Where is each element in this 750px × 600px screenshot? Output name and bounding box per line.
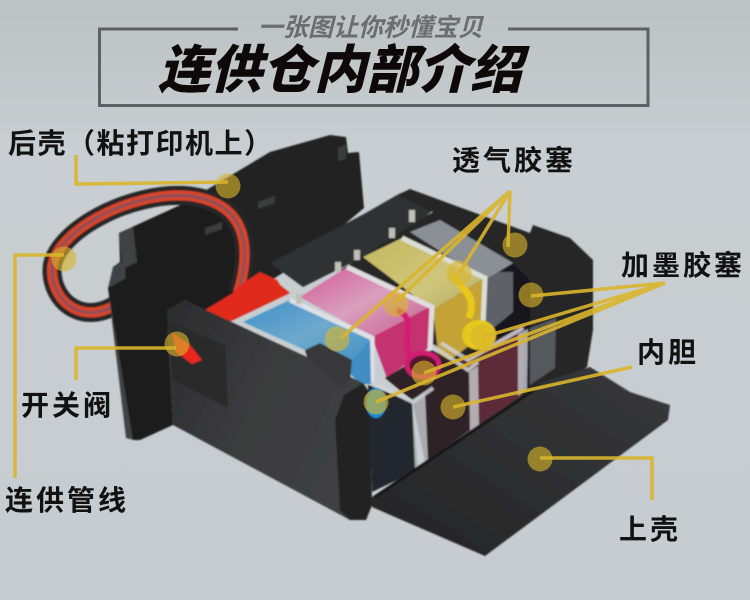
- black tank window: [470, 263, 530, 430]
- ink cable: [52, 195, 245, 312]
- cyan plug: [366, 388, 386, 418]
- right housing: [340, 189, 593, 420]
- title frame: [100, 29, 648, 106]
- lid hinge ridge: [375, 386, 540, 497]
- label: switch valve: 开关阀: [21, 390, 114, 421]
- magenta plug: [407, 353, 439, 377]
- shiny top panel: [270, 195, 433, 287]
- black tank top: [410, 220, 513, 280]
- rear plate of back shell: [203, 135, 364, 300]
- label: ink plugs: 加墨胶塞: [621, 250, 745, 281]
- yellow tank top: [363, 238, 485, 310]
- grey tank face: [484, 272, 513, 334]
- yellow tank front: [433, 278, 485, 368]
- box end face: [335, 383, 372, 520]
- back shell mounting marks: [205, 145, 346, 235]
- yellow tube: [453, 273, 471, 318]
- lower maroon section: [438, 325, 525, 432]
- subtitle: 一张图让你秒懂宝贝: [258, 14, 485, 42]
- label: back shell: 后壳（粘打印机上）: [8, 128, 275, 159]
- callout lines: [15, 155, 665, 500]
- left edge of back shell: [108, 227, 137, 440]
- label: air plugs: 透气胶塞: [452, 145, 576, 176]
- product photo illustration: [52, 135, 670, 556]
- magenta tank top: [300, 267, 430, 337]
- magenta tank front: [372, 307, 430, 378]
- magenta tube: [397, 310, 412, 358]
- front box: [167, 300, 372, 520]
- label: ink tube: 连供管线: [5, 485, 129, 516]
- right end cap opening: [530, 318, 556, 385]
- clear frame columns: [412, 329, 528, 469]
- clear strip on magenta tank: [347, 267, 432, 350]
- label: inner tank: 内胆: [637, 337, 699, 368]
- label: top shell: 上壳: [619, 514, 681, 545]
- switch lever: [172, 333, 202, 364]
- cyan tank front: [345, 340, 371, 384]
- red switch base: [205, 272, 290, 323]
- clear strip on yellow tank: [402, 238, 485, 325]
- clear strip on cyan tank: [290, 300, 372, 382]
- lower dark magenta section: [385, 350, 470, 462]
- cyan lower face: [368, 385, 418, 492]
- callout dots: [52, 174, 552, 472]
- cyan tank top: [243, 300, 372, 368]
- clear step ledges: [372, 328, 523, 402]
- switch inset: [170, 322, 228, 408]
- lid: [372, 367, 670, 556]
- box clip: [305, 343, 352, 387]
- yellow plug: [462, 320, 496, 350]
- lower left flange: [108, 278, 140, 440]
- tank pegs: [296, 210, 415, 304]
- title: 连供仓内部介绍: [158, 42, 530, 100]
- front plate of back shell: [110, 196, 252, 440]
